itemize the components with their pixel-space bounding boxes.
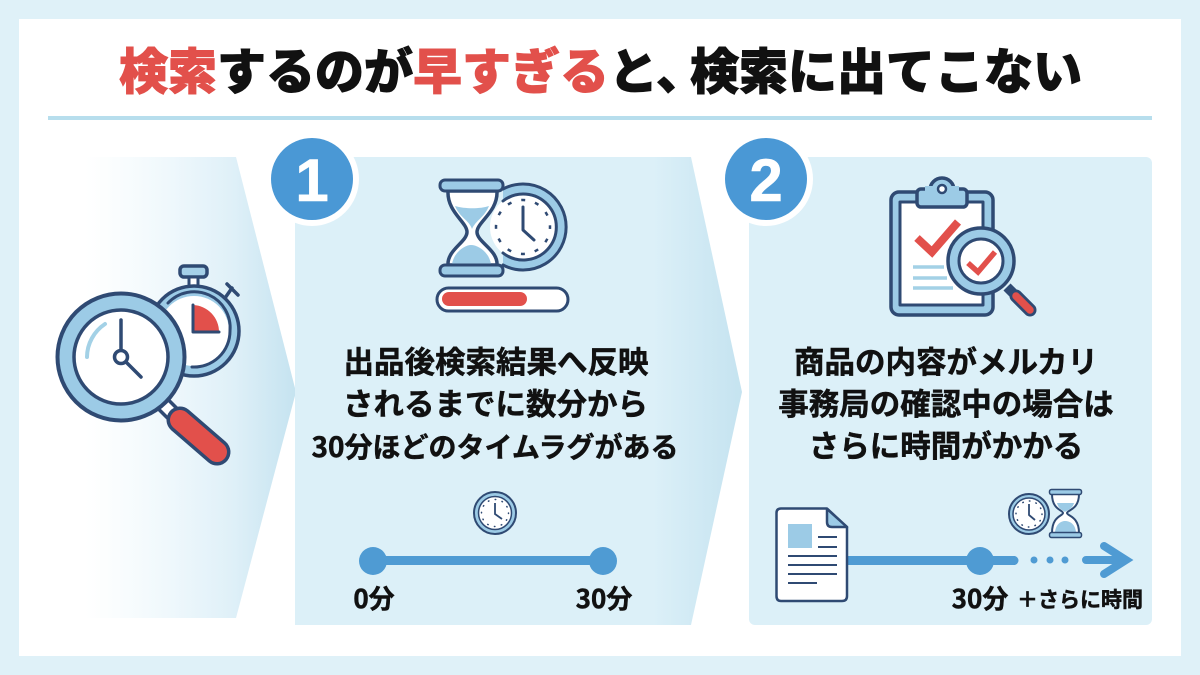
timeline: 0 to 30 minutes bbox=[353, 547, 632, 616]
text: step 1 description: 出品後検索結果へ反映 bbox=[344, 338, 648, 382]
text: step 2 description: 事務局の確認中の場合は bbox=[778, 380, 1114, 424]
badge: 1 bbox=[265, 132, 359, 226]
badge: 2 bbox=[719, 132, 813, 226]
panel: step 1 bbox=[265, 132, 742, 625]
text: step 1 description bbox=[311, 338, 679, 466]
badge: 1: 1 bbox=[295, 147, 329, 214]
timeline: document to extended time bbox=[845, 546, 1143, 616]
icon: hourglass and clock with progress bar bbox=[437, 180, 568, 311]
timeline: 0 to 30 minutes: 30分 bbox=[576, 579, 632, 616]
text: step 2 description: さらに時間がかかる bbox=[809, 422, 1083, 466]
panel: step 2 bbox=[719, 132, 1152, 625]
icon: clock and hourglass bbox=[1009, 490, 1082, 538]
badge: 2: 2 bbox=[749, 147, 783, 214]
timeline: document to extended time: ＋さらに時間 bbox=[1017, 584, 1143, 614]
text: step 2 description: 商品の内容がメルカリ bbox=[794, 338, 1098, 382]
text: step 2 description bbox=[778, 338, 1114, 466]
timeline: 0 to 30 minutes: 0分 bbox=[353, 579, 395, 616]
left arrow panel bbox=[85, 157, 296, 618]
icon: document bbox=[776, 508, 847, 601]
icon: small clock bbox=[474, 492, 516, 534]
icon: clipboard with magnifier bbox=[891, 178, 1030, 315]
title: 検索するのが早すぎると、 bbox=[119, 33, 705, 104]
timeline: document to extended time: 30分 bbox=[952, 579, 1008, 616]
text: step 1 description: 30分ほどのタイムラグがある bbox=[311, 426, 679, 466]
icon: magnifier and stopwatch bbox=[58, 266, 239, 452]
text: step 1 description: されるまでに数分から bbox=[343, 380, 648, 424]
title: 検索に出てこない bbox=[690, 33, 1082, 104]
